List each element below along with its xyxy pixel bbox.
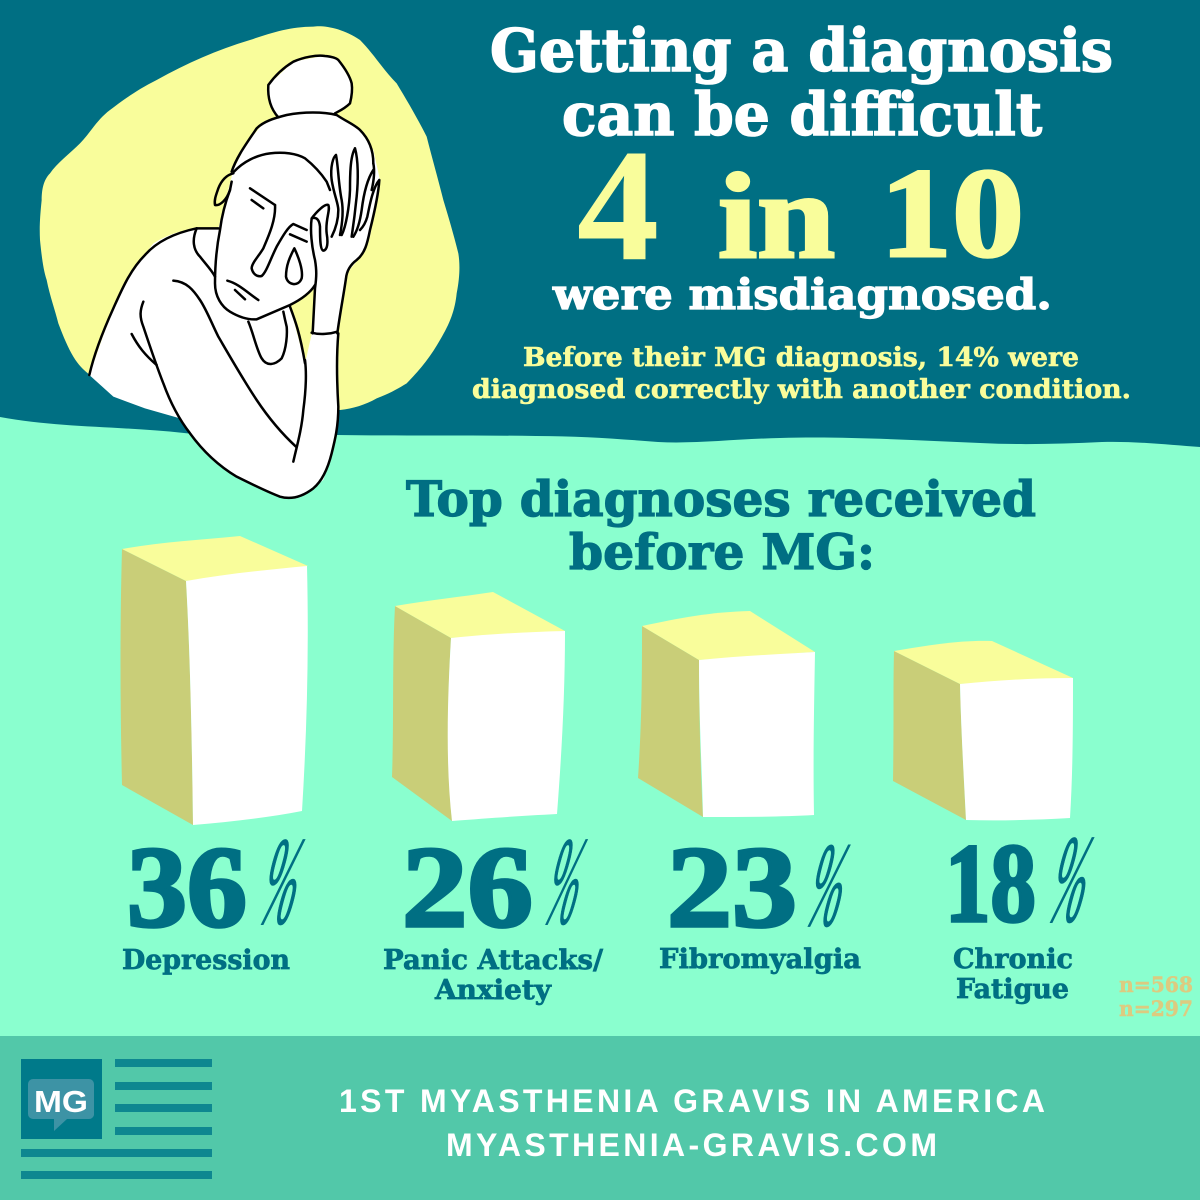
big statistic: 4 in 10 bbox=[577, 116, 1024, 294]
body silhouette bbox=[89, 56, 380, 498]
footer line 1: 1ST MYASTHENIA GRAVIS IN AMERICA bbox=[339, 1083, 1045, 1119]
face bbox=[215, 153, 330, 319]
line work bbox=[89, 56, 379, 498]
subtitle: were misdiagnosed: were misdiagnosed. bbox=[552, 270, 1052, 319]
nose bbox=[252, 205, 307, 276]
sample size note: n=297 bbox=[1119, 996, 1193, 1021]
stat: 36%: 36 bbox=[127, 824, 247, 952]
label: panic attacks / anxiety bbox=[383, 945, 603, 1006]
stat: 36% bbox=[127, 812, 319, 952]
stat: 23%: 23 bbox=[667, 824, 797, 952]
footer line 2: MYASTHENIA-GRAVIS.COM bbox=[446, 1127, 937, 1163]
logo: MG flag bbox=[21, 1059, 212, 1179]
big statistic: 4 in 10: 4 bbox=[577, 116, 659, 294]
heading: top diagnoses: Top diagnoses received bbox=[406, 470, 1036, 528]
heading: top diagnoses: before MG: bbox=[569, 523, 875, 581]
logo text: MG bbox=[34, 1084, 88, 1119]
panel: footer band bbox=[0, 1036, 1200, 1200]
cuff bbox=[312, 332, 337, 334]
label: chronic fatigue bbox=[953, 944, 1073, 1005]
label: chronic fatigue: Fatigue bbox=[956, 974, 1069, 1005]
bar: panic attacks 26% bbox=[392, 592, 565, 821]
stat: 18%: 18 bbox=[945, 822, 1036, 946]
sample size note bbox=[1119, 972, 1193, 1021]
label: depression: Depression bbox=[122, 945, 290, 976]
big statistic: 4 in 10: 10 bbox=[880, 142, 1024, 284]
hair bbox=[232, 112, 373, 172]
heading: top diagnoses bbox=[406, 470, 1036, 581]
arm fold bbox=[293, 360, 306, 462]
illustration: woman holding her head, crying bbox=[40, 26, 459, 498]
bar: chronic fatigue 18% bbox=[893, 641, 1073, 820]
note line 1: Before their MG diagnosis, 14% were bbox=[523, 343, 1079, 373]
label: fibromyalgia: Fibromyalgia bbox=[659, 944, 861, 975]
stat: 18%: % bbox=[1037, 810, 1108, 949]
bar: fibromyalgia 23% bbox=[638, 611, 815, 817]
big statistic: 4 in 10: in bbox=[718, 149, 835, 284]
sample size note: n=568 bbox=[1119, 972, 1193, 997]
stat: 23%: % bbox=[795, 819, 863, 952]
note line 2: diagnosed correctly with another condition. bbox=[472, 375, 1131, 405]
stat: 36%: % bbox=[248, 812, 319, 951]
stat: 23% bbox=[667, 819, 863, 952]
yellow gap between arm and chest bbox=[290, 287, 315, 363]
mouth bbox=[227, 281, 258, 300]
stat: 18% bbox=[945, 810, 1108, 949]
label: panic attacks / anxiety: Panic Attacks/ bbox=[383, 945, 603, 976]
yellow blob bbox=[40, 26, 459, 410]
bar: depression 36% bbox=[120, 536, 308, 825]
eye closed left bbox=[250, 188, 275, 208]
title: can be difficult: can be difficult bbox=[562, 80, 1042, 149]
chest inner arm bbox=[173, 281, 296, 447]
neck bbox=[194, 228, 215, 277]
collar bbox=[248, 312, 287, 364]
label: chronic fatigue: Chronic bbox=[953, 944, 1073, 975]
tear bbox=[286, 248, 302, 284]
bun bbox=[268, 56, 352, 117]
panel: teal header with wavy edge bbox=[0, 0, 1200, 447]
strap bbox=[290, 307, 305, 363]
title: getting a diagnosis: Getting a diagnosis bbox=[490, 16, 1113, 85]
text: % bbox=[533, 812, 601, 951]
stat: 26%: 26 bbox=[402, 824, 533, 952]
ear bbox=[215, 173, 233, 205]
stat: 26% bbox=[402, 812, 601, 952]
label: panic attacks / anxiety: Anxiety bbox=[434, 975, 552, 1006]
fingers bbox=[331, 155, 343, 237]
speech bubble bbox=[28, 1079, 94, 1131]
armpit bbox=[141, 302, 338, 498]
thumb and palm bbox=[311, 205, 329, 333]
shoulder and back bbox=[89, 228, 218, 375]
